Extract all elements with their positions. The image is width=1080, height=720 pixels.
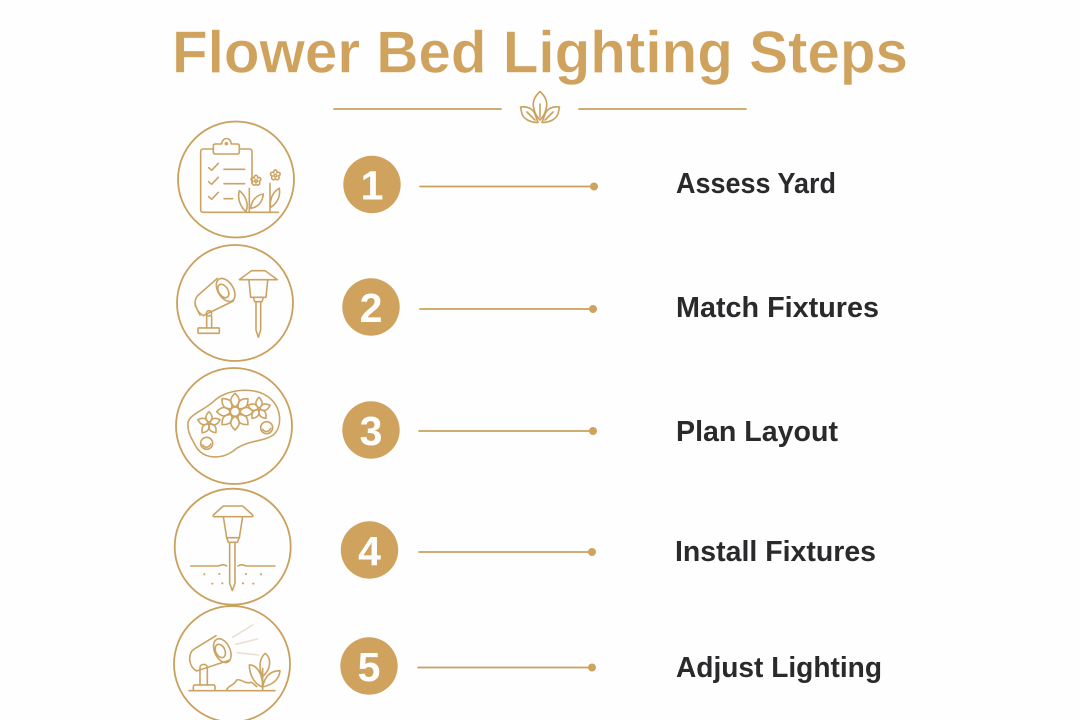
step 2 row <box>177 245 879 361</box>
number badge 2 <box>342 278 400 336</box>
label 3: Plan Layout <box>676 416 838 448</box>
label 2: Match Fixtures <box>676 292 879 324</box>
icon: staked light in ground <box>175 489 291 605</box>
number badge 5: 5 <box>358 644 380 690</box>
connector 1 <box>420 182 598 190</box>
number badge 4: 4 <box>358 528 381 574</box>
number badge 4 <box>341 521 398 579</box>
step 5 row <box>174 606 882 720</box>
step 4 row <box>175 489 876 605</box>
step 1 row <box>178 122 836 238</box>
title divider with leaf ornament <box>334 92 746 122</box>
icon: spotlight and path light <box>177 245 293 361</box>
number badge 3 <box>342 401 400 459</box>
number badge 1: 1 <box>361 162 383 208</box>
connector 3 <box>419 427 597 435</box>
step 3 row <box>176 368 838 484</box>
number badge 1 <box>343 156 401 213</box>
number badge 5 <box>340 637 398 695</box>
connector 5 <box>418 664 596 672</box>
icon: aimed spotlight over plant <box>174 606 290 720</box>
label 5: Adjust Lighting <box>676 652 882 684</box>
connector 2 <box>420 305 597 313</box>
label 4: Install Fixtures <box>675 536 876 568</box>
icon: flower bed layout <box>176 368 292 484</box>
label 1: Assess Yard <box>676 168 836 200</box>
title: Flower Bed Lighting Steps <box>172 20 908 86</box>
number badge 3: 3 <box>360 408 382 454</box>
connector 4 <box>419 548 596 556</box>
icon: clipboard with flowers <box>178 122 294 238</box>
number badge 2: 2 <box>360 285 382 331</box>
